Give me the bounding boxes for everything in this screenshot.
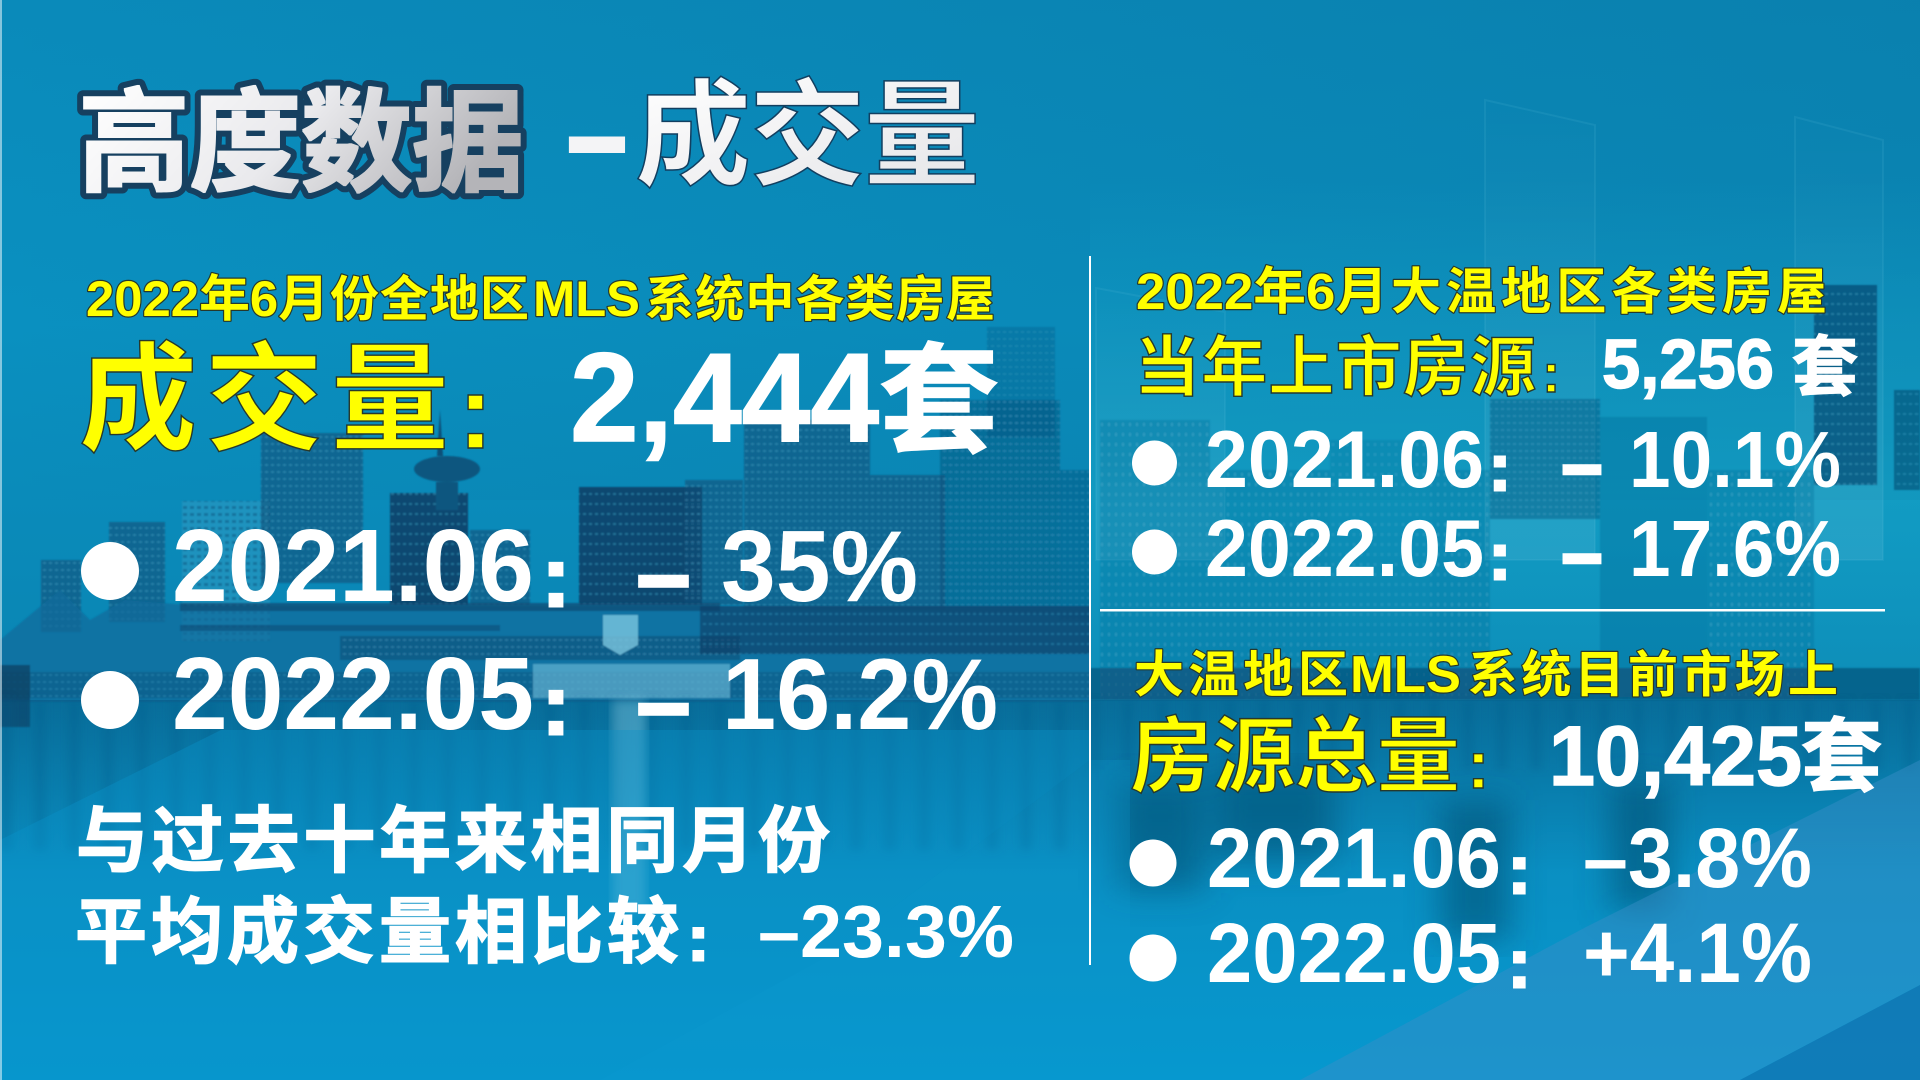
headline: sales volume 2,444: 2,444 xyxy=(570,327,879,468)
comparison: 2021.06 -35%: 2021.06 xyxy=(172,508,534,623)
inventory heading: MLS xyxy=(1350,646,1461,704)
faded glass towers xyxy=(1096,100,1883,560)
inventory heading xyxy=(1134,646,1838,704)
right skyline buildings xyxy=(1090,285,1920,700)
comparison: 2022.05 +4.1%: : xyxy=(1508,926,1531,1002)
title dash: – xyxy=(568,71,626,201)
comparison: 2022.05 -16.2% xyxy=(81,636,998,756)
left heading: 系统中各类房屋 xyxy=(645,273,995,327)
headline: sales volume 2,444: : xyxy=(458,354,493,471)
headline: total inventory 10,425: : xyxy=(1467,727,1490,803)
headline: total inventory 10,425: 10,425 xyxy=(1549,709,1802,803)
panel: left column, sales volume xyxy=(75,271,1014,974)
ten-year average comparison xyxy=(75,802,1014,974)
comparison: 2021.06 -10.1%: 10.1% xyxy=(1629,415,1841,504)
horizontal divider xyxy=(1100,609,1885,612)
headline: total inventory 10,425: 房源总量 xyxy=(1130,710,1460,803)
headline: new listings 5,256: 套 xyxy=(1792,330,1858,404)
headline: sales volume 2,444: 成交量 xyxy=(79,335,449,467)
comparison: 2021.06 -10.1%: 2021.06 xyxy=(1205,415,1484,505)
headline: new listings 5,256: : xyxy=(1542,342,1560,404)
headline: sales volume 2,444 xyxy=(79,327,999,471)
ten-year average comparison: 与过去十年来相同月份 xyxy=(76,802,830,882)
comparison: 2022.05 -17.6%: 2022.05 xyxy=(1205,504,1484,594)
panel: right bottom, total inventory xyxy=(1130,646,1882,1002)
comparison: 2021.06 -35%: – xyxy=(637,521,690,628)
ten-year average comparison: 平均成交量相比较 xyxy=(75,893,679,973)
left skyline buildings xyxy=(41,327,1090,641)
title part: 高度数据: 高度数据 xyxy=(78,81,524,206)
right heading: 大温地区各类房屋 xyxy=(1391,264,1827,320)
title part: 成交量: 成交量 xyxy=(635,71,980,201)
comparison: 2022.05 +4.1%: 2022.05 xyxy=(1207,906,1501,1000)
comparison: 2021.06 -3.8% xyxy=(1130,811,1812,908)
comparison: 2022.05 -17.6%: – xyxy=(1562,511,1602,596)
panel: right top, new listings xyxy=(1132,263,1858,596)
comparison: 2022.05 +4.1%: +4.1% xyxy=(1583,906,1812,1000)
waterfront xyxy=(0,590,1090,727)
comparison: 2022.05 -16.2%: 2022.05 xyxy=(172,636,534,751)
comparison: 2022.05 -17.6%: : xyxy=(1489,520,1511,593)
inventory heading: 大温地区 xyxy=(1134,647,1348,703)
comparison: 2022.05 -17.6% xyxy=(1132,504,1841,596)
headline: new listings 5,256 xyxy=(1134,325,1858,404)
ten-year average comparison: : xyxy=(688,905,709,974)
comparison: 2021.06 -10.1% xyxy=(1132,415,1841,507)
comparison: 2022.05 +4.1% xyxy=(1130,906,1812,1002)
comparison: 2021.06 -3.8%: : xyxy=(1508,832,1531,908)
left heading: 份全地区 xyxy=(330,273,529,327)
comparison: 2022.05 -16.2%: : xyxy=(542,658,570,752)
title xyxy=(78,71,980,206)
water reflections xyxy=(0,700,1920,870)
right heading xyxy=(1136,263,1827,320)
comparison: 2022.05 -16.2%: – xyxy=(637,649,690,756)
comparison: 2021.06 -35%: 35% xyxy=(721,511,918,623)
headline: total inventory 10,425: 套 xyxy=(1801,713,1882,803)
headline: total inventory 10,425 xyxy=(1130,709,1882,803)
comparison: 2021.06 -10.1%: – xyxy=(1562,422,1602,507)
comparison: 2022.05 -16.2%: 16.2% xyxy=(722,639,998,751)
comparison: 2021.06 -35%: : xyxy=(542,530,570,624)
right heading: 2022年6月 xyxy=(1136,263,1388,320)
comparison: 2021.06 -10.1%: : xyxy=(1489,431,1511,504)
ten-year average comparison: –23.3% xyxy=(758,890,1014,973)
headline: new listings 5,256: 当年上市房源 xyxy=(1134,330,1536,404)
comparison: 2021.06 -3.8%: 2021.06 xyxy=(1207,811,1501,905)
left heading xyxy=(86,271,995,327)
headline: new listings 5,256: 5,256 xyxy=(1602,325,1774,403)
comparison: 2022.05 -17.6%: 17.6% xyxy=(1629,504,1841,593)
left heading: MLS xyxy=(533,271,640,327)
inventory heading: 系统目前市场上 xyxy=(1468,647,1838,703)
left heading: 2022年6月 xyxy=(86,271,329,327)
diagonal light facets xyxy=(0,730,1090,1080)
comparison: 2021.06 -35% xyxy=(81,508,918,628)
headline: sales volume 2,444: 套 xyxy=(879,335,999,469)
comparison: 2021.06 -3.8%: –3.8% xyxy=(1583,811,1812,905)
vertical divider xyxy=(1089,256,1091,965)
